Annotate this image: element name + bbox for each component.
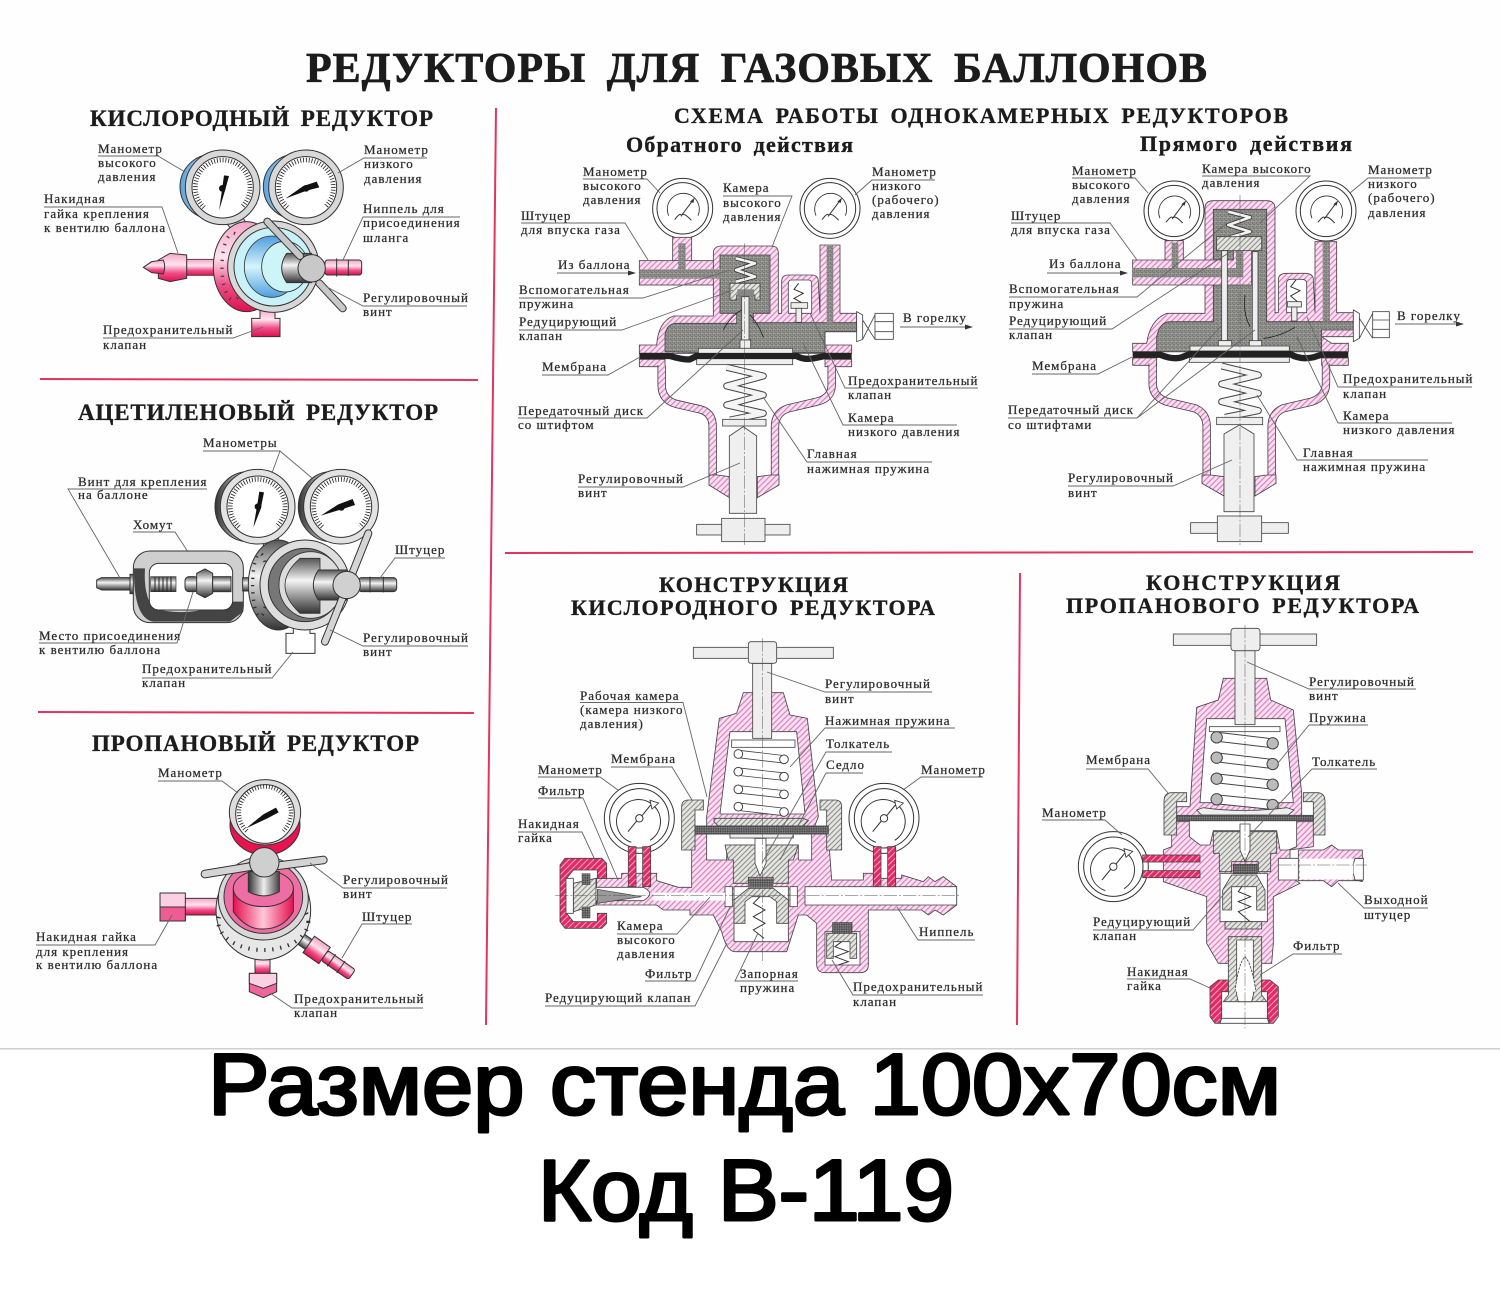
callout: safety valve: Предохранительный — [1343, 371, 1473, 386]
callout: gauge — [1042, 805, 1122, 835]
heading: oxygen construction: КОНСТРУКЦИЯ — [659, 572, 848, 597]
callout: low pressure gauge: низкого — [1368, 176, 1418, 191]
callout: membrane: Мембрана — [1086, 752, 1151, 767]
callout: high pressure chamber — [1202, 161, 1312, 223]
callout: reducing valve: Редуцирующий — [1093, 914, 1191, 929]
subheading: reverse action: Обратного действия — [626, 132, 853, 157]
callout: low pressure chamber: Камера — [1343, 408, 1390, 423]
callout: high pressure chamber — [723, 180, 792, 247]
callout: main spring — [1257, 395, 1428, 474]
callout: union nut: Накидная — [518, 816, 580, 831]
callout: main spring: нажимная пружина — [1303, 459, 1426, 474]
callout: union nut: гайка крепления — [44, 206, 150, 221]
callout: high pressure chamber: Камера высокого — [1202, 161, 1312, 176]
callout: fitting: Штуцер — [395, 542, 445, 557]
callout: inlet fitting: для впуска газа — [1011, 222, 1111, 237]
callout: pressure spring — [790, 713, 955, 767]
callout: safety valve — [103, 322, 263, 352]
caption: stand size: Размер стенда 100х70см — [208, 1037, 1281, 1133]
callout: mounting screw — [68, 474, 208, 578]
callout: shutoff spring — [735, 933, 799, 995]
callout: membrane — [1032, 357, 1132, 374]
illustration: oxygen reducer — [143, 150, 362, 337]
heading: working scheme: СХЕМА РАБОТЫ ОДНОКАМЕРНЫХ РЕДУКТОРОВ — [674, 103, 1288, 128]
callout: reducing valve: клапан — [1093, 928, 1137, 943]
callout: inlet fitting: Штуцер — [521, 208, 571, 223]
callout: safety valve: клапан — [853, 994, 897, 1009]
callout: adjusting screw — [310, 863, 449, 901]
callout: working chamber: (камера низкого — [580, 702, 683, 717]
callout: fitting — [342, 909, 412, 958]
arrow: from cylinder — [1047, 256, 1128, 276]
callout: adjusting screw — [767, 672, 932, 706]
callout: transfer disk: со штифтами — [1008, 417, 1092, 432]
panel: oxygen reducer — [44, 106, 469, 352]
callout: valve connection: к вентилю баллона — [39, 642, 161, 657]
callout: nipple: Ниппель — [919, 924, 974, 939]
heading: acetylene reducer: АЦЕТИЛЕНОВЫЙ РЕДУКТОР — [78, 400, 438, 425]
callout: inlet fitting: для впуска газа — [521, 222, 621, 237]
callout: filter — [1260, 938, 1342, 975]
callout: safety valve: клапан — [103, 337, 147, 352]
callout: low pressure gauge: давления — [364, 171, 423, 186]
callout: low pressure gauge: Манометр — [1368, 162, 1433, 177]
callout: adjusting screw: винт — [343, 886, 373, 901]
callout: safety valve: клапан — [1343, 386, 1387, 401]
diagram: reverse action section — [639, 178, 893, 545]
panel: direct action reducer — [1008, 131, 1473, 545]
callout: reducing valve — [1093, 887, 1230, 943]
callout: spring: Пружина — [1309, 710, 1367, 725]
callout: union nut: Накидная гайка — [36, 929, 137, 944]
callout: fitting: Штуцер — [362, 909, 412, 924]
callout: safety valve: Предохранительный — [853, 979, 983, 994]
callout: union nut: гайка — [1127, 978, 1162, 993]
callout: high pressure gauge: высокого — [98, 155, 157, 170]
callout: valve filter: Фильтр — [645, 966, 692, 981]
callout: seat: Седло — [826, 757, 865, 772]
callout: membrane — [542, 357, 640, 375]
callout: adjusting screw: винт — [363, 644, 393, 659]
callout: low pressure gauge — [1350, 162, 1436, 220]
callout: high pressure chamber: давления — [1202, 175, 1261, 190]
callout: adjusting screw: винт — [1309, 688, 1339, 703]
callout: reducing valve: клапан — [519, 328, 563, 343]
callout: reducing valve: Редуцирующий клапан — [545, 990, 692, 1005]
subheading: direct action: Прямого действия — [1140, 131, 1352, 156]
callout: pusher — [1248, 754, 1377, 837]
callout: high pressure gauge — [583, 164, 660, 207]
callout: outlet fitting: Выходной — [1364, 892, 1429, 907]
callout: membrane — [1086, 752, 1168, 793]
caption: product code: Код В-119 — [538, 1143, 954, 1239]
callout: high pressure gauge: высокого — [583, 178, 642, 193]
callout: adjusting screw: винт — [1068, 485, 1098, 500]
heading: propane construction: КОНСТРУКЦИЯ — [1146, 570, 1340, 595]
callout: low pressure gauge: давления — [872, 206, 931, 221]
callout: pusher: Толкатель — [1312, 754, 1376, 769]
callout: hose nipple: Ниппель для — [363, 201, 445, 216]
callout: membrane: Мембрана — [542, 359, 607, 374]
callout: adjusting screw: Регулировочный — [825, 676, 931, 691]
callout: high pressure gauge: давления — [98, 169, 157, 184]
callout: union nut: гайка — [518, 830, 553, 845]
callout: union nut: к вентилю баллона — [36, 957, 158, 972]
callout: valve filter — [645, 907, 730, 981]
callout: pressure spring: Нажимная пружина — [825, 713, 951, 728]
callout: high pressure chamber — [617, 897, 710, 961]
callout: safety valve: клапан — [294, 1005, 338, 1020]
diagram: oxygen reducer section — [555, 638, 960, 973]
callout: seat — [780, 757, 865, 860]
callout: high pressure gauge: высокого — [1072, 177, 1131, 192]
panel: propane reducer construction — [1042, 570, 1429, 1028]
callout: union nut: для крепления — [36, 944, 129, 959]
callout: working chamber: Рабочая камера — [580, 688, 679, 703]
callout: inlet filter — [538, 783, 618, 880]
callout: low pressure chamber: Камера — [848, 410, 895, 425]
callout: high pressure gauge — [1072, 163, 1148, 206]
callout: auxiliary spring — [1009, 223, 1227, 311]
heading: oxygen construction — [571, 572, 935, 620]
callout: adjusting screw: винт — [825, 691, 855, 706]
callout: safety valve: клапан — [142, 675, 186, 690]
callout: high pressure gauge — [98, 141, 185, 184]
callout: adjusting screw: Регулировочный — [1309, 674, 1415, 689]
callout: low pressure gauge: давления — [1368, 205, 1427, 220]
callout: safety valve — [270, 991, 424, 1020]
callout: safety valve — [142, 652, 293, 690]
callout: safety valve: Предохранительный — [142, 661, 272, 676]
panel: propane reducer — [36, 731, 449, 1020]
callout: adjusting screw: Регулировочный — [363, 290, 469, 305]
arrow: from cylinder: Из баллона — [1049, 256, 1121, 271]
callout: filter: Фильтр — [1293, 938, 1340, 953]
callout: low pressure chamber: низкого давления — [1343, 422, 1455, 437]
callout: low pressure gauge: Манометр — [872, 164, 937, 179]
callout: union nut: к вентилю баллона — [44, 220, 166, 235]
arrow: from cylinder: Из баллона — [558, 257, 630, 272]
heading: oxygen construction: КИСЛОРОДНОГО РЕДУКТОРА — [571, 595, 935, 620]
callout: fitting — [380, 542, 445, 578]
callout: membrane: Мембрана — [1032, 358, 1097, 373]
callout: clamp — [133, 517, 188, 552]
callout: outlet fitting — [1338, 883, 1429, 922]
panel: reverse action reducer — [518, 132, 978, 545]
callout: inlet fitting — [521, 208, 648, 260]
callout: high pressure gauge: Манометр — [98, 141, 163, 156]
callout: safety valve: Предохранительный — [103, 322, 233, 337]
callout: low pressure gauge: низкого — [364, 156, 414, 171]
callout: union nut: Накидная — [1127, 964, 1189, 979]
callout: safety valve: клапан — [848, 387, 892, 402]
heading: propane construction: ПРОПАНОВОГО РЕДУКТОРА — [1066, 593, 1419, 618]
callout: gauges — [203, 435, 312, 478]
callout: transfer disk — [518, 330, 743, 432]
callout: low pressure chamber — [1297, 337, 1455, 437]
callout: high pressure chamber: Камера — [617, 918, 664, 933]
callout: main spring — [763, 397, 932, 476]
callout: low pressure chamber: низкого давления — [848, 424, 960, 439]
heading: propane construction — [1066, 570, 1419, 618]
callout: adjusting screw — [1068, 460, 1232, 500]
callout: low pressure chamber — [803, 343, 960, 439]
callout: inlet filter: Фильтр — [538, 783, 586, 798]
callout: auxiliary spring: пружина — [1009, 296, 1064, 311]
callout: shutoff spring: пружина — [740, 980, 795, 995]
callout: transfer disk: со штифтом — [518, 417, 595, 432]
callout: pusher: Толкатель — [826, 736, 890, 751]
callout: reducing valve: Редуцирующий — [1009, 313, 1107, 328]
callout: union nut — [1127, 964, 1210, 993]
main title: РЕДУКТОРЫ ДЛЯ ГАЗОВЫХ БАЛЛОНОВ — [306, 46, 1207, 92]
callout: gauge: Манометр — [158, 765, 223, 780]
callout: auxiliary spring — [519, 270, 730, 311]
callout: safety valve: Предохранительный — [294, 991, 424, 1006]
callout: transfer disk: Передаточный диск — [1008, 402, 1134, 417]
heading: oxygen reducer: КИСЛОРОДНЫЙ РЕДУКТОР — [90, 106, 433, 131]
callout: right gauge: Манометр — [921, 762, 986, 777]
diagram: propane reducer section — [1078, 625, 1367, 1028]
callout: low pressure gauge: (рабочего) — [1368, 190, 1436, 205]
callout: gauge — [158, 765, 238, 793]
callout: working chamber: давления) — [580, 716, 644, 731]
callout: safety valve — [832, 960, 983, 1009]
callout: transfer disk: Передаточный диск — [518, 403, 644, 418]
arrow: to burner — [900, 310, 973, 330]
callout: adjusting screw: винт — [578, 485, 608, 500]
callout: high pressure gauge: Манометр — [1072, 163, 1137, 178]
callout: hose nipple: присоединения — [363, 215, 461, 230]
callout: hose nipple: шланга — [363, 230, 409, 245]
callout: membrane — [611, 751, 692, 800]
callout: safety valve — [1307, 317, 1473, 401]
callout: low pressure gauge: низкого — [872, 178, 922, 193]
callout: reducing valve: Редуцирующий — [519, 314, 617, 329]
callout: right gauge — [903, 762, 986, 790]
callout: auxiliary spring: пружина — [519, 296, 574, 311]
callout: outlet fitting: штуцер — [1364, 907, 1411, 922]
callout: adjusting screw — [578, 463, 740, 500]
callout: safety valve — [810, 313, 978, 402]
diagram: direct action section — [1133, 181, 1389, 545]
callout: main spring: Главная — [1303, 445, 1354, 460]
callout: reducing valve — [519, 290, 733, 343]
callout: main spring: нажимная пружина — [807, 461, 930, 476]
callout: left gauge: Манометр — [538, 762, 603, 777]
callout: low pressure gauge — [338, 142, 429, 186]
callout: union nut — [36, 915, 172, 972]
callout: adjusting screw: Регулировочный — [343, 872, 449, 887]
callout: main spring: Главная — [807, 446, 858, 461]
callout: transfer disk — [1008, 325, 1255, 432]
callout: high pressure chamber: давления — [617, 946, 676, 961]
callout: spring — [1278, 710, 1368, 763]
callout: working chamber — [580, 688, 707, 797]
callout: reducing valve: клапан — [1009, 327, 1053, 342]
callout: inlet fitting: Штуцер — [1011, 208, 1061, 223]
callout: high pressure chamber: высокого — [723, 195, 782, 210]
callout: mounting screw: Винт для крепления — [78, 474, 208, 489]
callout: adjusting screw — [327, 287, 469, 319]
arrow: to burner: В горелку — [903, 310, 967, 325]
callout: membrane: Мембрана — [611, 751, 676, 766]
illustration: propane reducer — [160, 780, 358, 998]
callout: adjusting screw — [330, 630, 469, 659]
callout: low pressure gauge: (рабочего) — [872, 192, 940, 207]
callout: hose nipple — [343, 201, 461, 260]
callout: shutoff spring: Запорная — [740, 966, 799, 981]
callout: auxiliary spring: Вспомогательная — [519, 282, 630, 297]
callout: clamp: Хомут — [133, 517, 173, 532]
callout: safety valve: Предохранительный — [848, 373, 978, 388]
callout: nipple — [897, 907, 975, 940]
callout: pusher — [762, 736, 892, 863]
callout: mounting screw: на баллоне — [78, 487, 149, 502]
callout: union nut — [44, 191, 178, 253]
callout: gauges: Манометры — [203, 435, 278, 450]
callout: valve connection: Место присоединения — [39, 628, 181, 643]
callout: high pressure gauge: Манометр — [583, 164, 648, 179]
callout: low pressure gauge: Манометр — [364, 142, 429, 157]
panel: oxygen reducer construction — [518, 572, 986, 1009]
callout: inlet fitting — [1011, 208, 1137, 260]
callout: adjusting screw — [1247, 662, 1416, 703]
callout: low pressure gauge — [855, 164, 940, 221]
arrow: to burner: В горелку — [1397, 308, 1461, 323]
callout: high pressure gauge: давления — [1072, 191, 1131, 206]
callout: union nut — [518, 816, 595, 860]
callout: high pressure chamber: высокого — [617, 932, 676, 947]
callout: high pressure gauge: давления — [583, 192, 642, 207]
callout: adjusting screw: Регулировочный — [1068, 470, 1174, 485]
illustration: acetylene reducer — [97, 469, 397, 653]
heading: propane reducer: ПРОПАНОВЫЙ РЕДУКТОР — [92, 731, 419, 756]
callout: reducing valve — [1009, 250, 1233, 342]
callout: left gauge — [538, 762, 618, 790]
callout: auxiliary spring: Вспомогательная — [1009, 281, 1120, 296]
callout: high pressure chamber: Камера — [723, 180, 770, 195]
callout: valve connection — [39, 592, 193, 657]
callout: adjusting screw: винт — [363, 304, 393, 319]
callout: union nut: Накидная — [44, 191, 106, 206]
callout: gauge: Манометр — [1042, 805, 1107, 820]
callout: high pressure chamber: давления — [723, 209, 782, 224]
callout: reducing valve — [545, 943, 727, 1006]
callout: adjusting screw: Регулировочный — [578, 471, 684, 486]
callout: adjusting screw: Регулировочный — [363, 630, 469, 645]
panel: acetylene reducer — [39, 400, 469, 690]
